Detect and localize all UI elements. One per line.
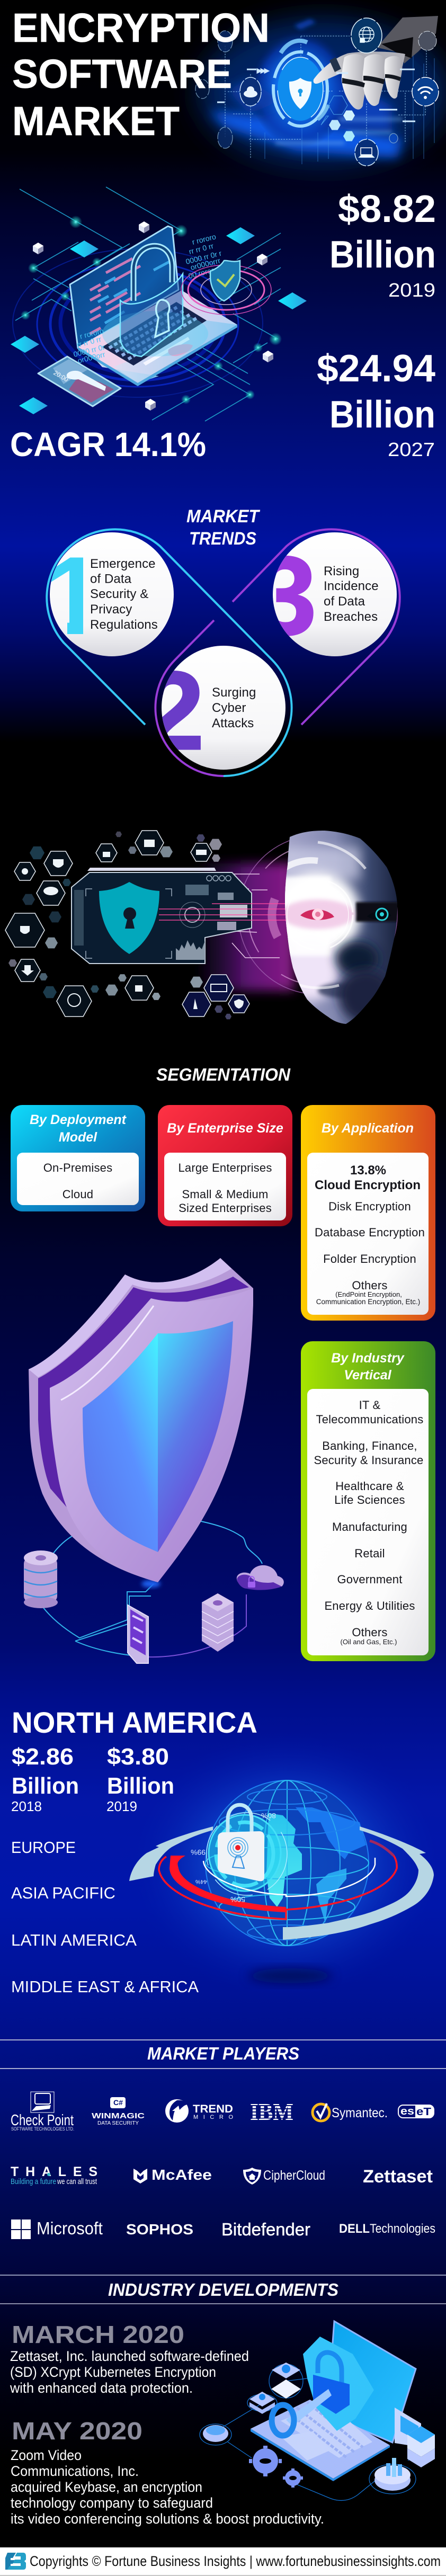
heading: market trends: MARKET: [186, 506, 261, 527]
2027 value: [317, 347, 435, 460]
cyan diamonds: [11, 227, 307, 414]
logo: microsoft: [11, 2218, 103, 2239]
chart puck: [374, 2458, 411, 2491]
heading: market players: MARKET PLAYERS: [147, 2044, 299, 2063]
2018 value: 2018: [11, 1798, 42, 1814]
magenta glow band: [201, 863, 294, 991]
front plate: [50, 1288, 253, 1582]
list: Banking, Finance,: [322, 1439, 417, 1452]
list: On-Premises: [43, 1161, 112, 1174]
trend 3: [273, 532, 397, 656]
light orbit band right: [283, 1826, 434, 1940]
list: Communication Encryption, Etc.): [316, 1298, 420, 1306]
trend 3: 3: [255, 533, 317, 658]
trend 2: Attacks: [212, 716, 254, 730]
small cubes: [33, 221, 273, 411]
logo: thales: THALES: [11, 2164, 97, 2179]
logo: check point: [11, 2092, 74, 2132]
icon: wifi: [412, 77, 439, 106]
trend 1: Regulations: [90, 618, 158, 632]
list: IT &: [359, 1398, 380, 1412]
development: march 2020: MARCH 2020: [12, 2321, 184, 2348]
title: [12, 5, 270, 144]
market size stats: [10, 188, 436, 463]
2019 value: [329, 188, 436, 301]
binary digits: r rororo: [79, 326, 104, 341]
2027 value: 2027: [388, 439, 435, 460]
list: Manufacturing: [332, 1520, 407, 1534]
icon: laptop: [355, 139, 378, 166]
binary digits: or000orr: [77, 350, 106, 365]
blue face left: [83, 1333, 158, 1552]
continents: [266, 1807, 366, 1923]
laser lines: [159, 904, 297, 920]
red orbit: [159, 1841, 397, 1919]
trend 3: of Data: [324, 594, 365, 609]
logo: microsoft: Microsoft: [37, 2218, 103, 2238]
network ring: [41, 1520, 262, 1657]
list: Folder Encryption: [323, 1252, 416, 1265]
panel: by industry vertical: [301, 1341, 435, 1661]
orbit percent labels: [191, 1812, 276, 1904]
other regions list: EUROPE: [11, 1838, 76, 1857]
icon: faint circles: [195, 31, 398, 148]
globe with padlock illustration: [127, 1732, 445, 1997]
glow nodes: [21, 216, 282, 404]
logo: dell technologies: [339, 2222, 435, 2236]
heading: [30, 1112, 127, 1145]
other regions list: MIDDLE EAST & AFRICA: [11, 1977, 199, 1996]
teal shield: [99, 882, 159, 954]
heading: Vertical: [344, 1368, 392, 1383]
trend 3: Breaches: [324, 610, 378, 624]
list: [307, 1153, 429, 1315]
eyes: [300, 908, 391, 920]
other regions list: ASIA PACIFIC: [11, 1884, 115, 1902]
globe grid: [206, 1780, 369, 1946]
trend 2: 2: [142, 648, 204, 773]
binary digits: or000orrr: [190, 256, 221, 272]
database stack: [24, 1550, 58, 1608]
blue face right: [158, 1321, 233, 1552]
icon: cloud: [240, 77, 261, 106]
development: may 2020: [11, 2417, 324, 2527]
list: Healthcare &: [335, 1479, 404, 1493]
panel: by deployment model: [11, 1105, 145, 1211]
2019 value: $8.82: [338, 188, 436, 230]
list: Large Enterprises: [178, 1161, 272, 1174]
title: MARKET: [12, 99, 180, 144]
orbit percent labels: 99%: [191, 1848, 206, 1857]
filled hexagons: [8, 832, 231, 1019]
signal rings: [181, 265, 271, 315]
trend 1: Emergence: [90, 557, 156, 571]
phone with key: 20:00: [52, 369, 70, 384]
orbit percent labels: 44%: [195, 1878, 207, 1885]
logo: winmagic: DATA SECURITY: [97, 2120, 139, 2126]
logo: check point: Check Point: [11, 2112, 74, 2129]
2019 value: $3.80: [107, 1744, 169, 1770]
back plate: [29, 1258, 253, 1582]
trend 1: Security &: [90, 587, 148, 601]
2018 value: [11, 1744, 79, 1814]
title: ENCRYPTION: [12, 5, 270, 51]
logo: winmagic: C#: [113, 2098, 123, 2107]
list: (Oil and Gas, Etc.): [341, 1638, 397, 1646]
other regions list: LATIN AMERICA: [11, 1931, 137, 1949]
list: Others: [352, 1279, 388, 1292]
2019 value: Billion: [107, 1773, 174, 1799]
hero illustration: robot hand touching shield: [195, 16, 446, 167]
blue haze: [199, 19, 446, 167]
server stack: [202, 1593, 234, 1652]
nodes: [203, 2363, 301, 2442]
security panel: [72, 868, 252, 964]
laptop screen: [70, 226, 179, 348]
trend 2: Cyber: [212, 701, 246, 715]
binary digits: 00 rororor: [188, 264, 221, 280]
development: may 2020: MAY 2020: [12, 2417, 142, 2445]
list: Life Sciences: [334, 1493, 405, 1507]
2019 value: 2019: [106, 1798, 137, 1814]
development: may 2020: its video conferencing solutions & boost productivity.: [11, 2511, 324, 2527]
logo: symantec: Symantec.: [332, 2106, 388, 2120]
padlock: [218, 1805, 264, 1881]
list: Telecommunications: [316, 1413, 423, 1426]
development: may 2020: Communications, Inc.: [11, 2463, 139, 2479]
phone with key: [38, 356, 121, 406]
orbit percent labels: 50%: [230, 1895, 245, 1904]
binary digits: rr rr 0 rr: [188, 242, 215, 256]
list: Retail: [354, 1547, 385, 1560]
heading: industry developments: INDUSTRY DEVELOPMENTS: [108, 2280, 338, 2299]
trend 3: Incidence: [324, 579, 379, 593]
title: SOFTWARE: [12, 51, 232, 97]
logo: eset: eT: [416, 2106, 431, 2118]
heading: By Enterprise Size: [167, 1121, 283, 1136]
keyboard: [102, 302, 207, 366]
logo: eset: es: [400, 2106, 414, 2117]
logo: trend micro: [165, 2099, 233, 2123]
development: march 2020: Zettaset, Inc. launched software-defined: [10, 2348, 249, 2364]
robot arm and fingers: [314, 16, 438, 110]
north america stats: [11, 1706, 257, 1814]
heading: By Industry: [331, 1351, 405, 1366]
heading: By Deployment: [30, 1112, 127, 1127]
logo: trend micro: MICRO: [193, 2114, 233, 2120]
footer: [0, 2547, 446, 2576]
list: Cloud Encryption: [315, 1178, 421, 1192]
2018 value: Billion: [12, 1773, 79, 1799]
logo: dell technologies: DELL: [339, 2222, 370, 2236]
laptop base: [78, 290, 237, 383]
data lines: [225, 36, 426, 159]
cloud lock: [237, 1565, 284, 1590]
concentric rings: [13, 249, 263, 397]
2019 value: 2019: [388, 279, 435, 301]
trend 2: Surging: [212, 685, 256, 700]
2019 value: Billion: [329, 234, 436, 276]
list: Security & Insurance: [314, 1454, 423, 1467]
server cubes: [395, 2408, 435, 2467]
development: may 2020: Zoom Video: [11, 2447, 82, 2463]
trends connector rings: [47, 529, 400, 776]
list: [17, 1153, 139, 1205]
gears: [249, 2446, 303, 2488]
heading: market trends: [186, 506, 261, 549]
heading: segmentation: SEGMENTATION: [156, 1065, 291, 1084]
big 3D shield illustration: [24, 1258, 284, 1663]
icon: white shield: [289, 78, 311, 109]
icon: globe lock: [351, 18, 382, 53]
heading: [331, 1351, 405, 1383]
2027 value: $24.94: [317, 347, 435, 390]
face: [285, 831, 397, 1024]
logo: mcafee: McAfee: [151, 2167, 212, 2183]
binary digits: 0000 rr 0r: [73, 343, 106, 359]
2019 value: [106, 1744, 174, 1814]
padlock: [102, 246, 208, 356]
development: may 2020: acquired Keybase, an encryption: [11, 2479, 202, 2495]
trend 1: of Data: [90, 572, 132, 586]
list: Small & Medium: [182, 1188, 268, 1201]
hex cluster: [217, 69, 415, 141]
trend 1: Privacy: [90, 602, 132, 617]
circuit lines: [15, 187, 281, 421]
light orbit band left: [129, 1826, 213, 1881]
logo: symantec: [313, 2103, 388, 2121]
laptop with key illustration: [200, 2321, 435, 2500]
connector lines: [200, 2364, 432, 2500]
development: march 2020: with enhanced data protection.: [10, 2380, 193, 2396]
laptop base: [251, 2400, 390, 2479]
laptop security illustration: [11, 187, 307, 421]
heading: NORTH AMERICA: [12, 1706, 257, 1739]
other regions list: [11, 1838, 199, 1996]
phone: [128, 1605, 148, 1663]
cyan hologram disc: [207, 1813, 287, 1895]
laptop screen: [327, 2321, 416, 2443]
trend 1: 1: [43, 533, 105, 658]
icon: joint circle: [418, 31, 436, 50]
shield: [303, 2337, 374, 2431]
list: Energy & Utilities: [324, 1599, 415, 1612]
2027 value: Billion: [329, 394, 435, 436]
logo: ciphercloud: [243, 2168, 325, 2185]
2018 value: $2.86: [12, 1744, 74, 1770]
list: 13.8%: [350, 1163, 386, 1178]
outlined hex icons: [5, 831, 249, 1017]
white orbit: [203, 1858, 375, 1896]
heading: Model: [59, 1130, 97, 1145]
panel: by enterprise size: [158, 1105, 292, 1226]
heading: By Application: [322, 1121, 414, 1136]
shield ring: [273, 41, 328, 126]
code lines on screen: [90, 259, 170, 339]
panel: by application: [301, 1105, 435, 1321]
list: Others: [352, 1626, 388, 1639]
logo: winmagic: [92, 2097, 145, 2126]
list: (EndPoint Encryption,: [335, 1290, 402, 1298]
logo: dell technologies: Technologies: [370, 2222, 435, 2236]
binary digits: [73, 232, 222, 365]
CAGR: CAGR 14.1%: [10, 425, 206, 463]
logo: zettaset: Zettaset: [363, 2167, 433, 2187]
development: march 2020: (SD) XCrypt Kubernetes Encryption: [10, 2364, 216, 2380]
development: may 2020: technology company to safeguard: [11, 2495, 213, 2511]
logo: mcafee: [133, 2167, 212, 2183]
list: Database Encryption: [315, 1226, 425, 1239]
binary digits: r rororo: [191, 232, 217, 246]
logo: sophos: SOPHOS: [126, 2221, 193, 2238]
trend 2: [162, 646, 286, 770]
logo: thales: [11, 2164, 97, 2186]
globe disc: [206, 1780, 369, 1946]
logo: winmagic: WINMAGIC: [92, 2111, 145, 2120]
logo: ibm: IBM: [250, 2098, 293, 2125]
trend 3: Rising: [324, 564, 359, 578]
list: Cloud: [63, 1188, 93, 1201]
logo: thales: we can all trust: [57, 2177, 97, 2186]
cyber face illustration: [5, 826, 403, 1028]
list: [307, 1389, 429, 1655]
orbit percent labels: 80%: [261, 1812, 276, 1820]
heading: market trends: TRENDS: [189, 529, 256, 549]
binary digits: 0000 rr 0r r: [185, 249, 222, 266]
trend 1: [43, 532, 174, 658]
logo: eset: [398, 2105, 434, 2118]
padlock: [313, 2352, 350, 2414]
list: Disk Encryption: [328, 1200, 411, 1213]
list: Government: [337, 1573, 403, 1586]
logo: ciphercloud: CipherCloud: [263, 2168, 325, 2183]
logo: trend micro: TREND: [193, 2103, 233, 2115]
binary digits: rr rr 0 rr: [76, 335, 102, 349]
list: Sized Enterprises: [179, 1201, 272, 1215]
shield with check: [210, 261, 240, 301]
icon: FB logo: [5, 2553, 26, 2570]
key: [272, 2389, 332, 2436]
logo: bitdefender: Bitdefender: [221, 2220, 310, 2239]
logo: thales: Building a future: [11, 2177, 56, 2186]
logo: check point: SOFTWARE TECHNOLOGIES LTD.: [11, 2126, 74, 2132]
hud rings: [228, 835, 397, 994]
development: march 2020: [10, 2321, 249, 2396]
hex icon glyphs: [20, 840, 244, 1009]
list: [164, 1153, 286, 1220]
